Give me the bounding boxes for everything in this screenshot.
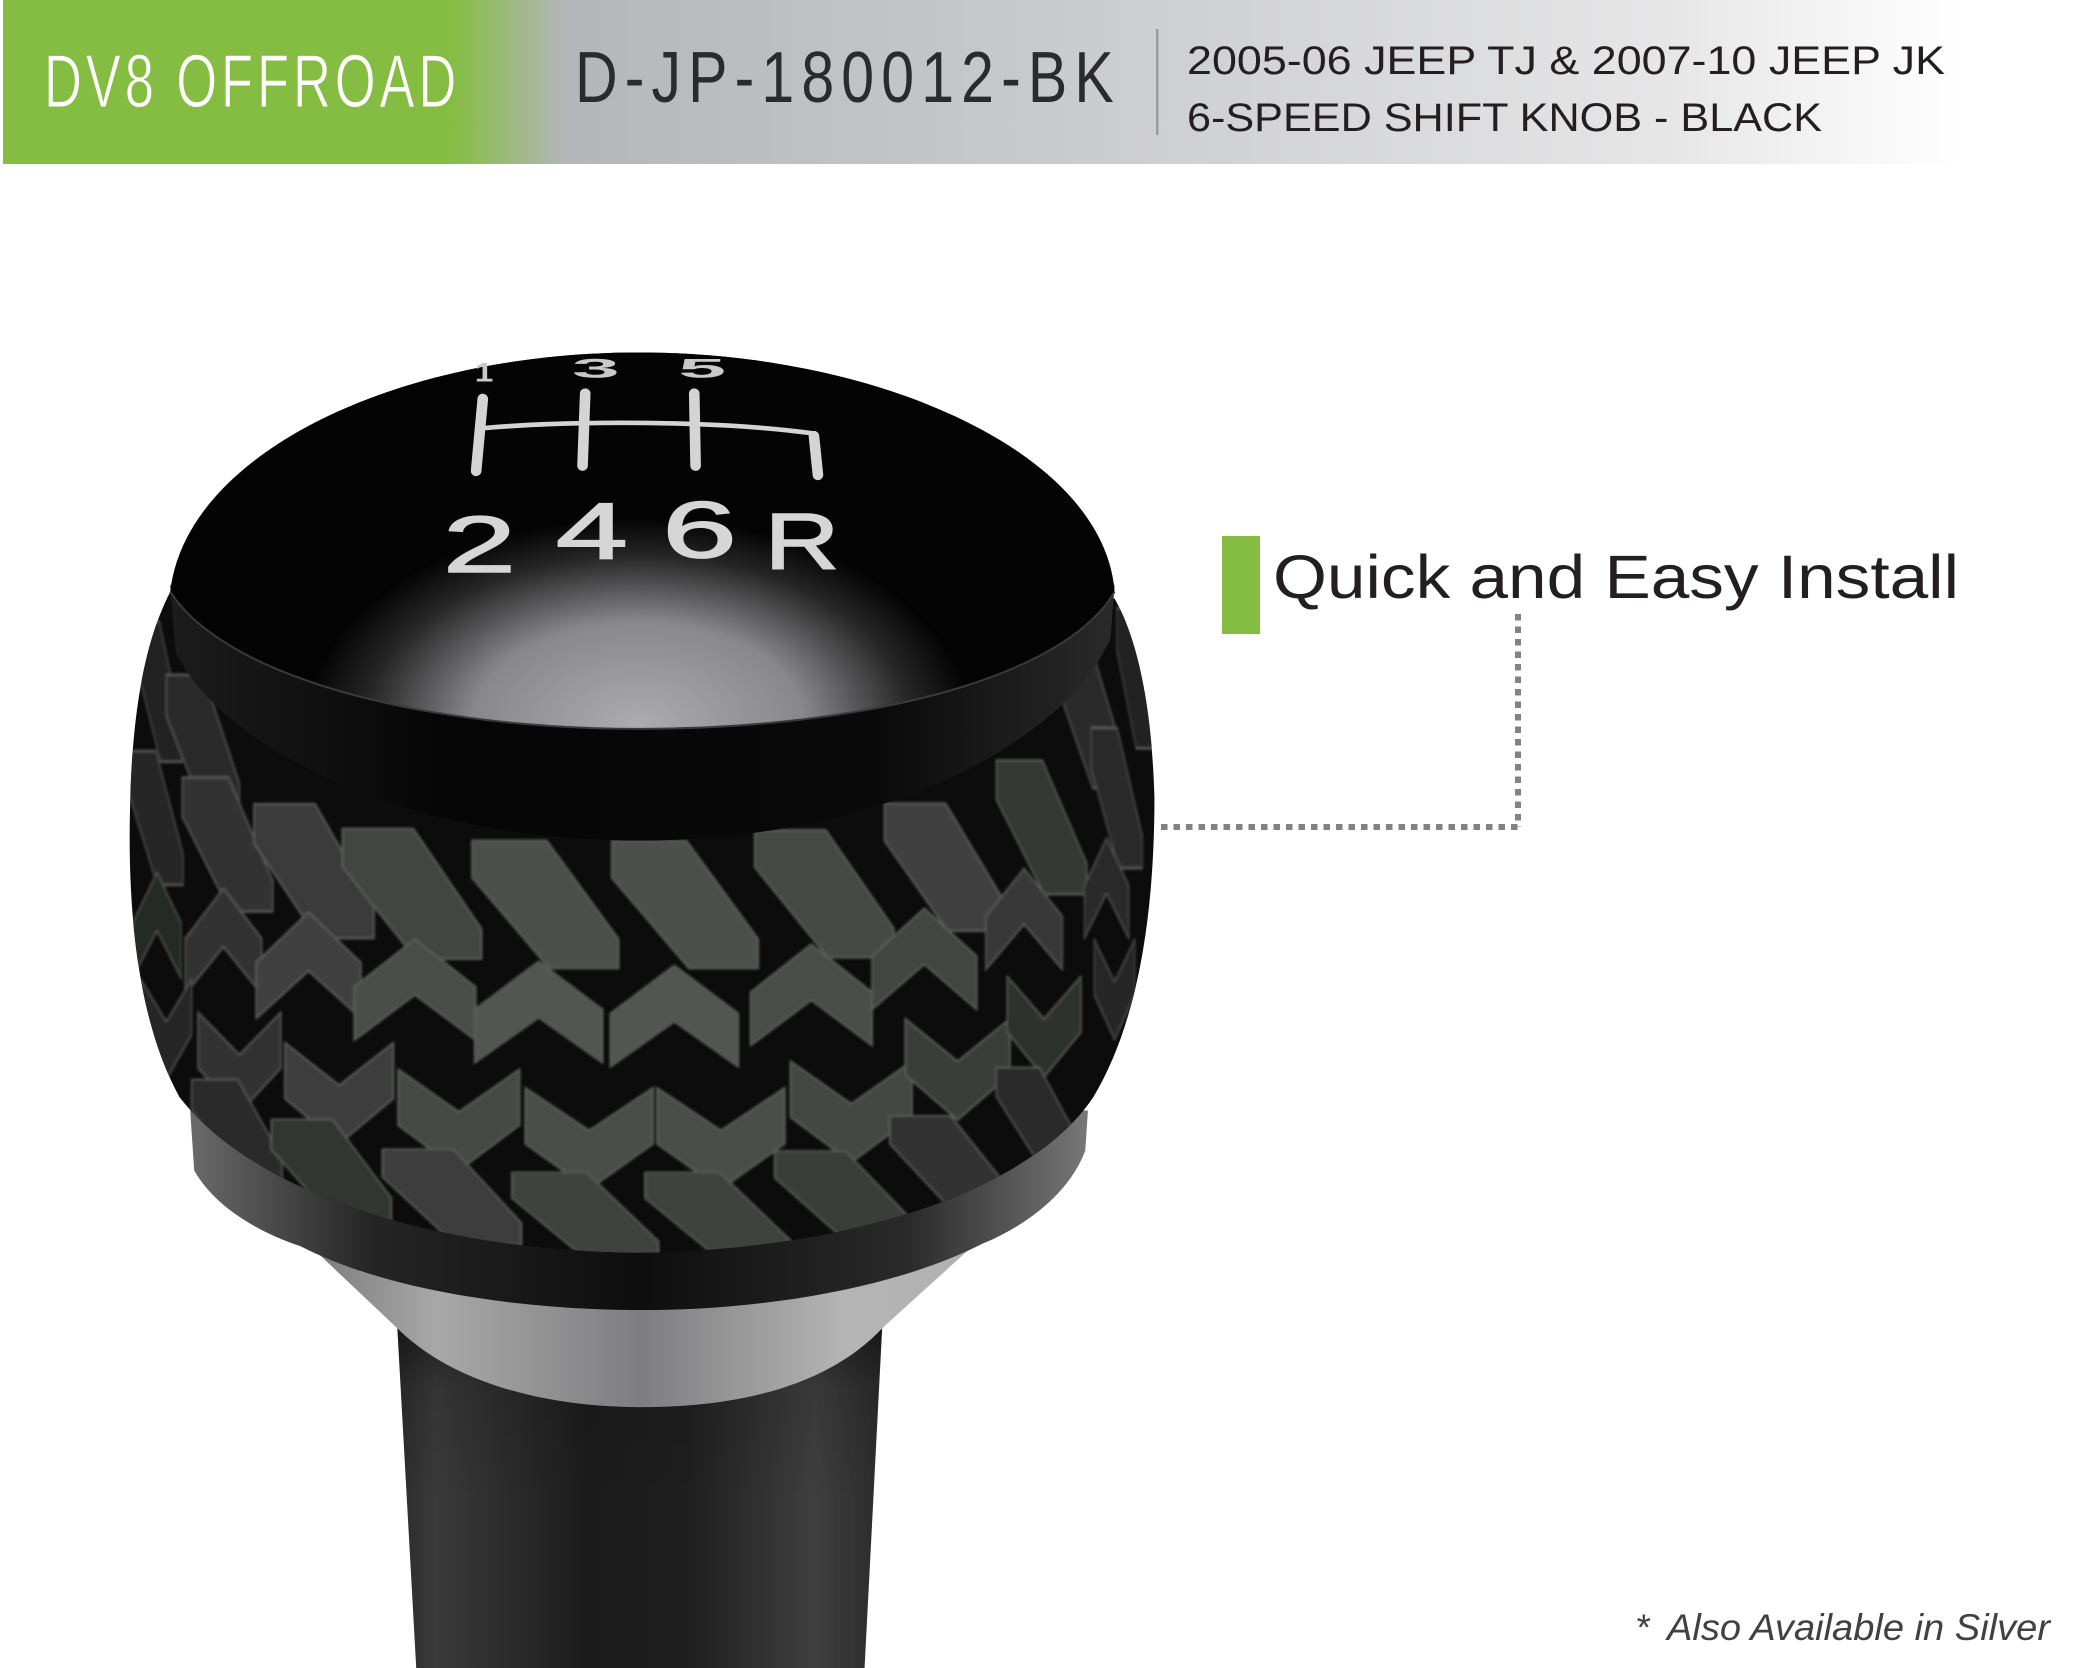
footnote: Also Available in Silver	[1665, 1607, 2052, 1648]
product description: 2005-06 JEEP TJ & 2007-10 JEEP JK	[1187, 39, 1945, 83]
tread row 4	[192, 1067, 1081, 1262]
cap top face	[170, 352, 1115, 729]
shift pattern	[476, 394, 818, 475]
gear numbers 1 3 5: 5	[678, 354, 727, 384]
collar	[190, 1111, 1088, 1310]
callout text: Quick and Easy Install	[1273, 543, 1959, 611]
gear numbers 2 4 6 R: 6	[662, 485, 737, 574]
cone	[301, 1237, 983, 1407]
cap ring	[170, 585, 1115, 841]
product photo: shift knob	[128, 352, 1154, 1668]
gear numbers 2 4 6 R	[443, 485, 839, 589]
gear numbers 1 3 5	[475, 354, 727, 388]
header banner	[3, 0, 2085, 164]
tread side blocks	[136, 608, 1153, 815]
dotted leader line	[1161, 614, 1521, 827]
shaft	[396, 1310, 883, 1668]
gear numbers 2 4 6 R: 4	[556, 487, 628, 576]
product description: 6-SPEED SHIFT KNOB - BLACK	[1187, 96, 1822, 140]
gear numbers 2 4 6 R: 2	[443, 500, 516, 589]
gear numbers 1 3 5: 1	[475, 358, 494, 388]
header divider	[1156, 29, 1158, 135]
gear numbers 1 3 5: 3	[572, 354, 620, 384]
brand name: DV8 OFFROAD	[44, 39, 456, 123]
tread row 2	[133, 838, 1129, 1067]
callout marker	[1222, 536, 1260, 634]
gear numbers 2 4 6 R: R	[765, 497, 839, 586]
tire tread	[128, 592, 1154, 1262]
tread row 1	[128, 728, 1142, 968]
part number: D-JP-180012-BK	[575, 36, 1114, 117]
footnote: *	[1635, 1607, 1651, 1648]
tread row 3	[141, 939, 1135, 1189]
product description	[1187, 39, 1945, 140]
